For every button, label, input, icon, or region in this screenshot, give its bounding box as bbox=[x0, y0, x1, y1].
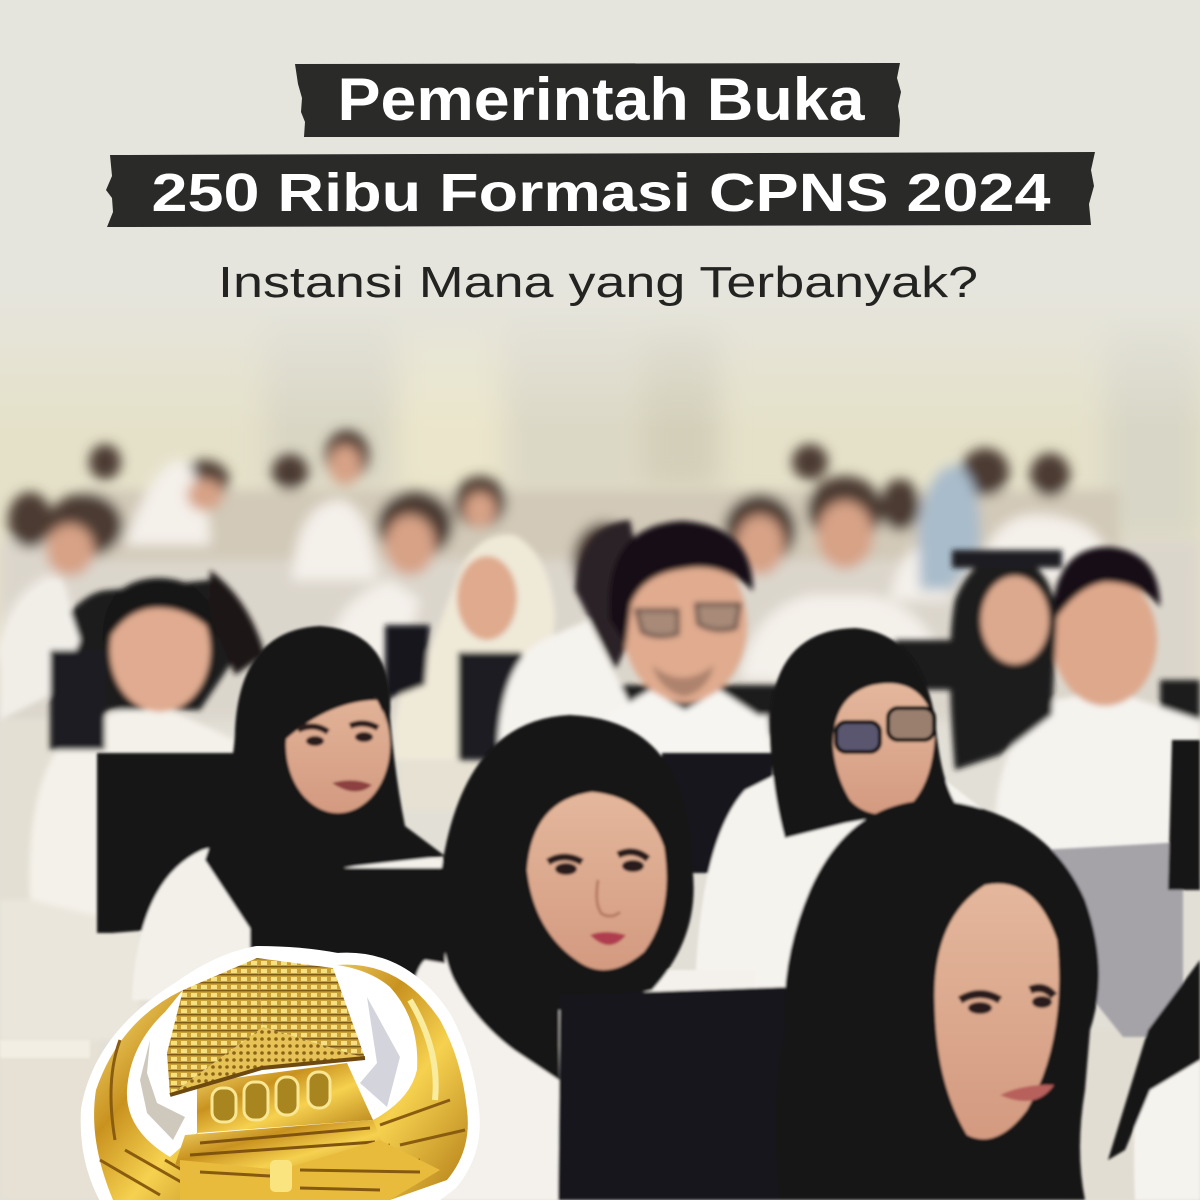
title banner: line 2 bbox=[106, 152, 1095, 227]
subtitle: Instansi Mana yang Terbanyak? bbox=[218, 258, 978, 307]
icon: golden Korpri emblem bbox=[93, 958, 468, 1200]
person: hijab woman left bbox=[132, 830, 462, 1000]
laptop: front centre bbox=[558, 987, 810, 1200]
front desks and laptops bbox=[0, 626, 1200, 1200]
emblem wreath left bbox=[94, 990, 270, 1200]
person: right man bbox=[995, 690, 1200, 880]
person: far right edge bbox=[1134, 1020, 1200, 1200]
laptop: mid right bbox=[662, 753, 772, 873]
person: left woman bbox=[30, 710, 235, 920]
desks bbox=[0, 720, 1200, 1200]
laptop: silver right bbox=[1040, 842, 1183, 1037]
person: hijab woman right with glasses bbox=[695, 760, 1035, 1030]
emblem white sticker outline bbox=[93, 958, 468, 1200]
laptop: front left bbox=[250, 868, 445, 1003]
emblem wreath right bbox=[290, 965, 468, 1200]
emblem base and knot bbox=[175, 1120, 440, 1200]
person: left far man bbox=[0, 580, 80, 720]
laptops back bbox=[385, 625, 430, 700]
laptop: left bbox=[97, 753, 237, 933]
person: white hijab woman bbox=[394, 534, 555, 760]
emblem building bbox=[197, 1063, 373, 1133]
emblem wreath strands bbox=[100, 1000, 465, 1195]
title banner: line 2: 250 Ribu Formasi CPNS 2024 bbox=[152, 163, 1050, 223]
emblem photo seen through holes bbox=[140, 1040, 185, 1140]
top fade into paper background bbox=[0, 0, 1200, 430]
laptop: far right edge bbox=[1168, 740, 1200, 890]
title banner: line 1: Pemerintah Buka bbox=[338, 66, 865, 133]
person: back right hijab bbox=[950, 555, 1057, 770]
emblem roof bbox=[167, 958, 365, 1095]
person: center hijab woman bbox=[395, 960, 755, 1200]
person: center man with glasses bbox=[498, 620, 773, 770]
middle row people, soft focus bbox=[0, 520, 1200, 920]
person: right hijab woman, nearest bbox=[776, 800, 1099, 1200]
back rows of people, blurred bbox=[0, 430, 1200, 720]
